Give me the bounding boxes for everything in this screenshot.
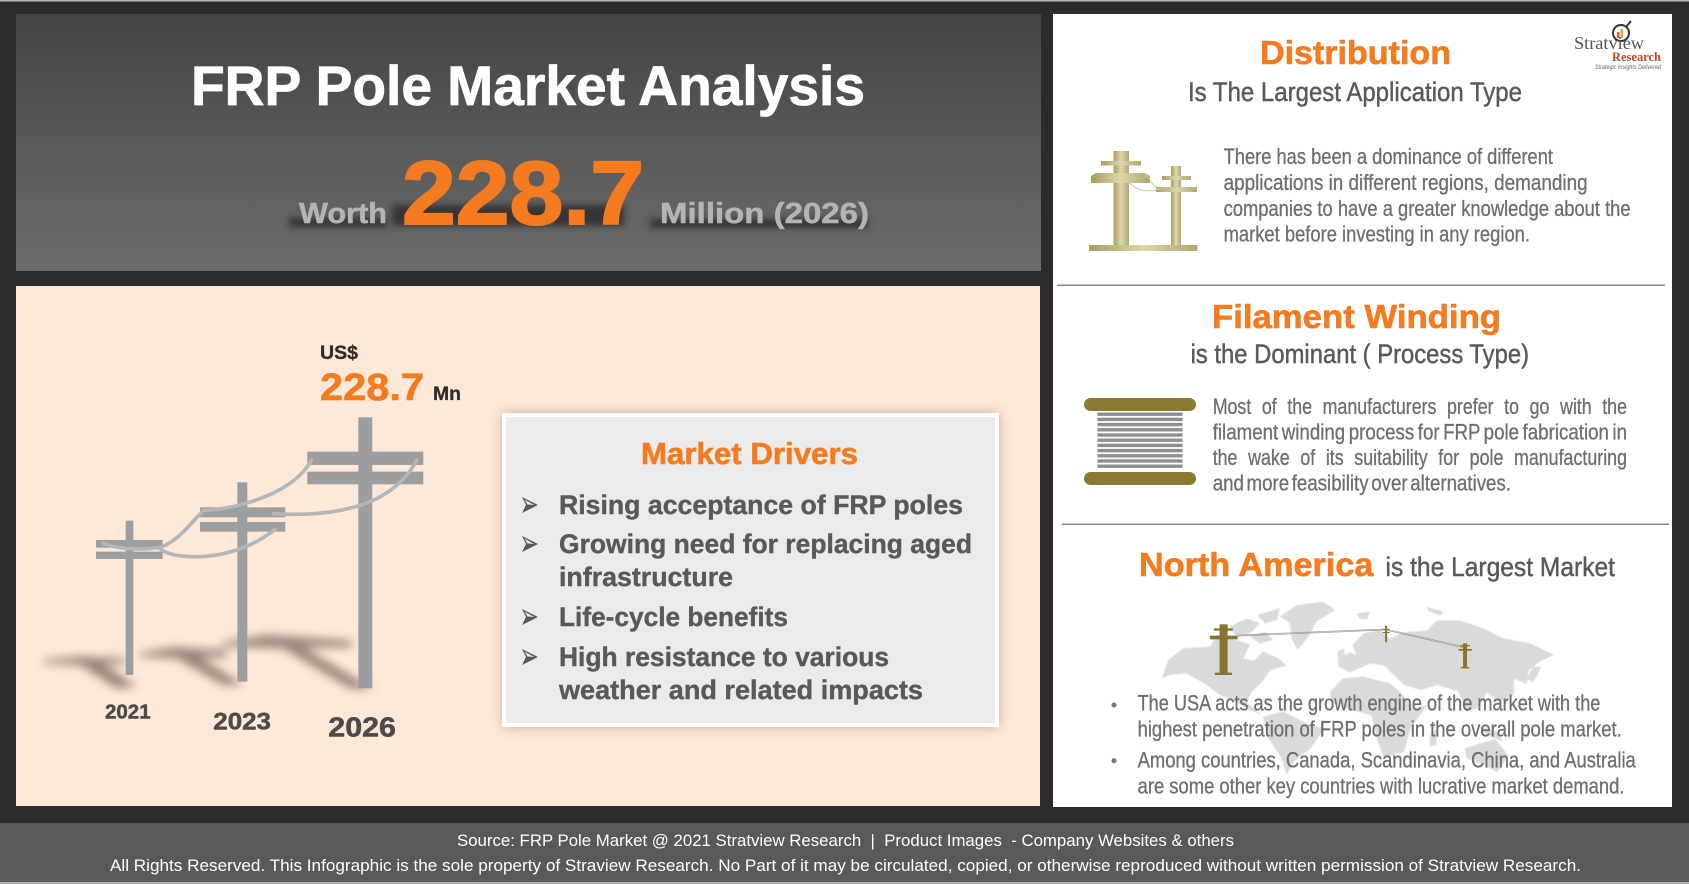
year labels	[105, 701, 396, 743]
chart value callout	[320, 343, 461, 409]
driver list: weather and related impacts	[558, 675, 923, 705]
market value headline: Worth	[299, 198, 387, 230]
panel: title banner	[16, 14, 1041, 271]
text block: There has been a dominance of different	[1224, 144, 1553, 169]
year labels: 2021	[105, 701, 151, 723]
icon: filament spool	[1084, 398, 1196, 485]
text block: applications in different regions, demanding	[1224, 170, 1588, 195]
market value headline: 228.7	[402, 144, 644, 244]
driver list: Life-cycle benefits	[559, 602, 788, 632]
logo: Stratview	[1574, 33, 1644, 53]
year labels: 2023	[213, 708, 271, 735]
panel: key segments	[1053, 14, 1672, 807]
icons: poles across the map	[1210, 624, 1472, 675]
poles	[96, 417, 423, 688]
text block: market before investing in any region.	[1224, 222, 1530, 247]
chart: growing utility poles	[43, 343, 461, 743]
driver list: Growing need for replacing aged	[559, 529, 972, 559]
market value headline: Million (2026)	[660, 198, 869, 230]
bullet list	[1112, 691, 1636, 798]
bullet list: The USA acts as the growth engine of the market with the	[1138, 691, 1600, 716]
text block	[1224, 144, 1631, 247]
section: distribution	[1089, 21, 1662, 251]
logo: Strategic Insights Delivered	[1595, 65, 1662, 71]
subheading: is the Dominant ( Process Type)	[1191, 339, 1529, 369]
title: FRP Pole Market Analysis	[191, 54, 865, 117]
footer	[0, 823, 1689, 884]
year labels: 2026	[328, 712, 396, 743]
bullet arrows	[522, 497, 538, 665]
heading: Distribution	[1260, 34, 1451, 71]
driver list: High resistance to various	[559, 642, 889, 672]
driver list	[558, 490, 972, 705]
footer: Source: FRP Pole Market @ 2021 Stratview Research | Product Images - Company Websites & others	[457, 831, 1234, 850]
wires	[103, 460, 417, 557]
pole shadows	[43, 635, 373, 689]
panel: market growth and drivers	[16, 286, 1040, 806]
chart value callout: Mn	[433, 384, 461, 405]
text block	[1213, 394, 1627, 496]
logo: Research	[1612, 49, 1662, 64]
world map	[1162, 602, 1554, 775]
market value headline	[289, 144, 869, 244]
subheading: Is The Largest Application Type	[1188, 77, 1522, 107]
driver list: infrastructure	[559, 562, 733, 592]
chart value callout: 228.7	[320, 367, 424, 409]
text block: and more feasibility over alternatives.	[1213, 471, 1511, 496]
driver list: Rising acceptance of FRP poles	[559, 490, 963, 520]
heading: Filament Winding	[1212, 298, 1501, 335]
icon: utility poles	[1089, 151, 1198, 251]
text block: filament winding process for FRP pole fabrication in	[1213, 419, 1627, 444]
section: north america	[1112, 546, 1636, 798]
footer: All Rights Reserved. This Infographic is the sole property of Straview Research. No Part of it may be circulated, copied, or otherwise reproduced without written permission of Stratview Research.	[110, 856, 1581, 875]
heading: North America	[1139, 546, 1374, 583]
section: filament winding	[1084, 298, 1627, 496]
heading: Market Drivers	[641, 436, 858, 471]
chart value callout: US$	[320, 343, 358, 364]
logo	[1574, 21, 1662, 71]
subheading: is the Largest Market	[1386, 552, 1615, 582]
panel: market drivers	[502, 413, 999, 727]
